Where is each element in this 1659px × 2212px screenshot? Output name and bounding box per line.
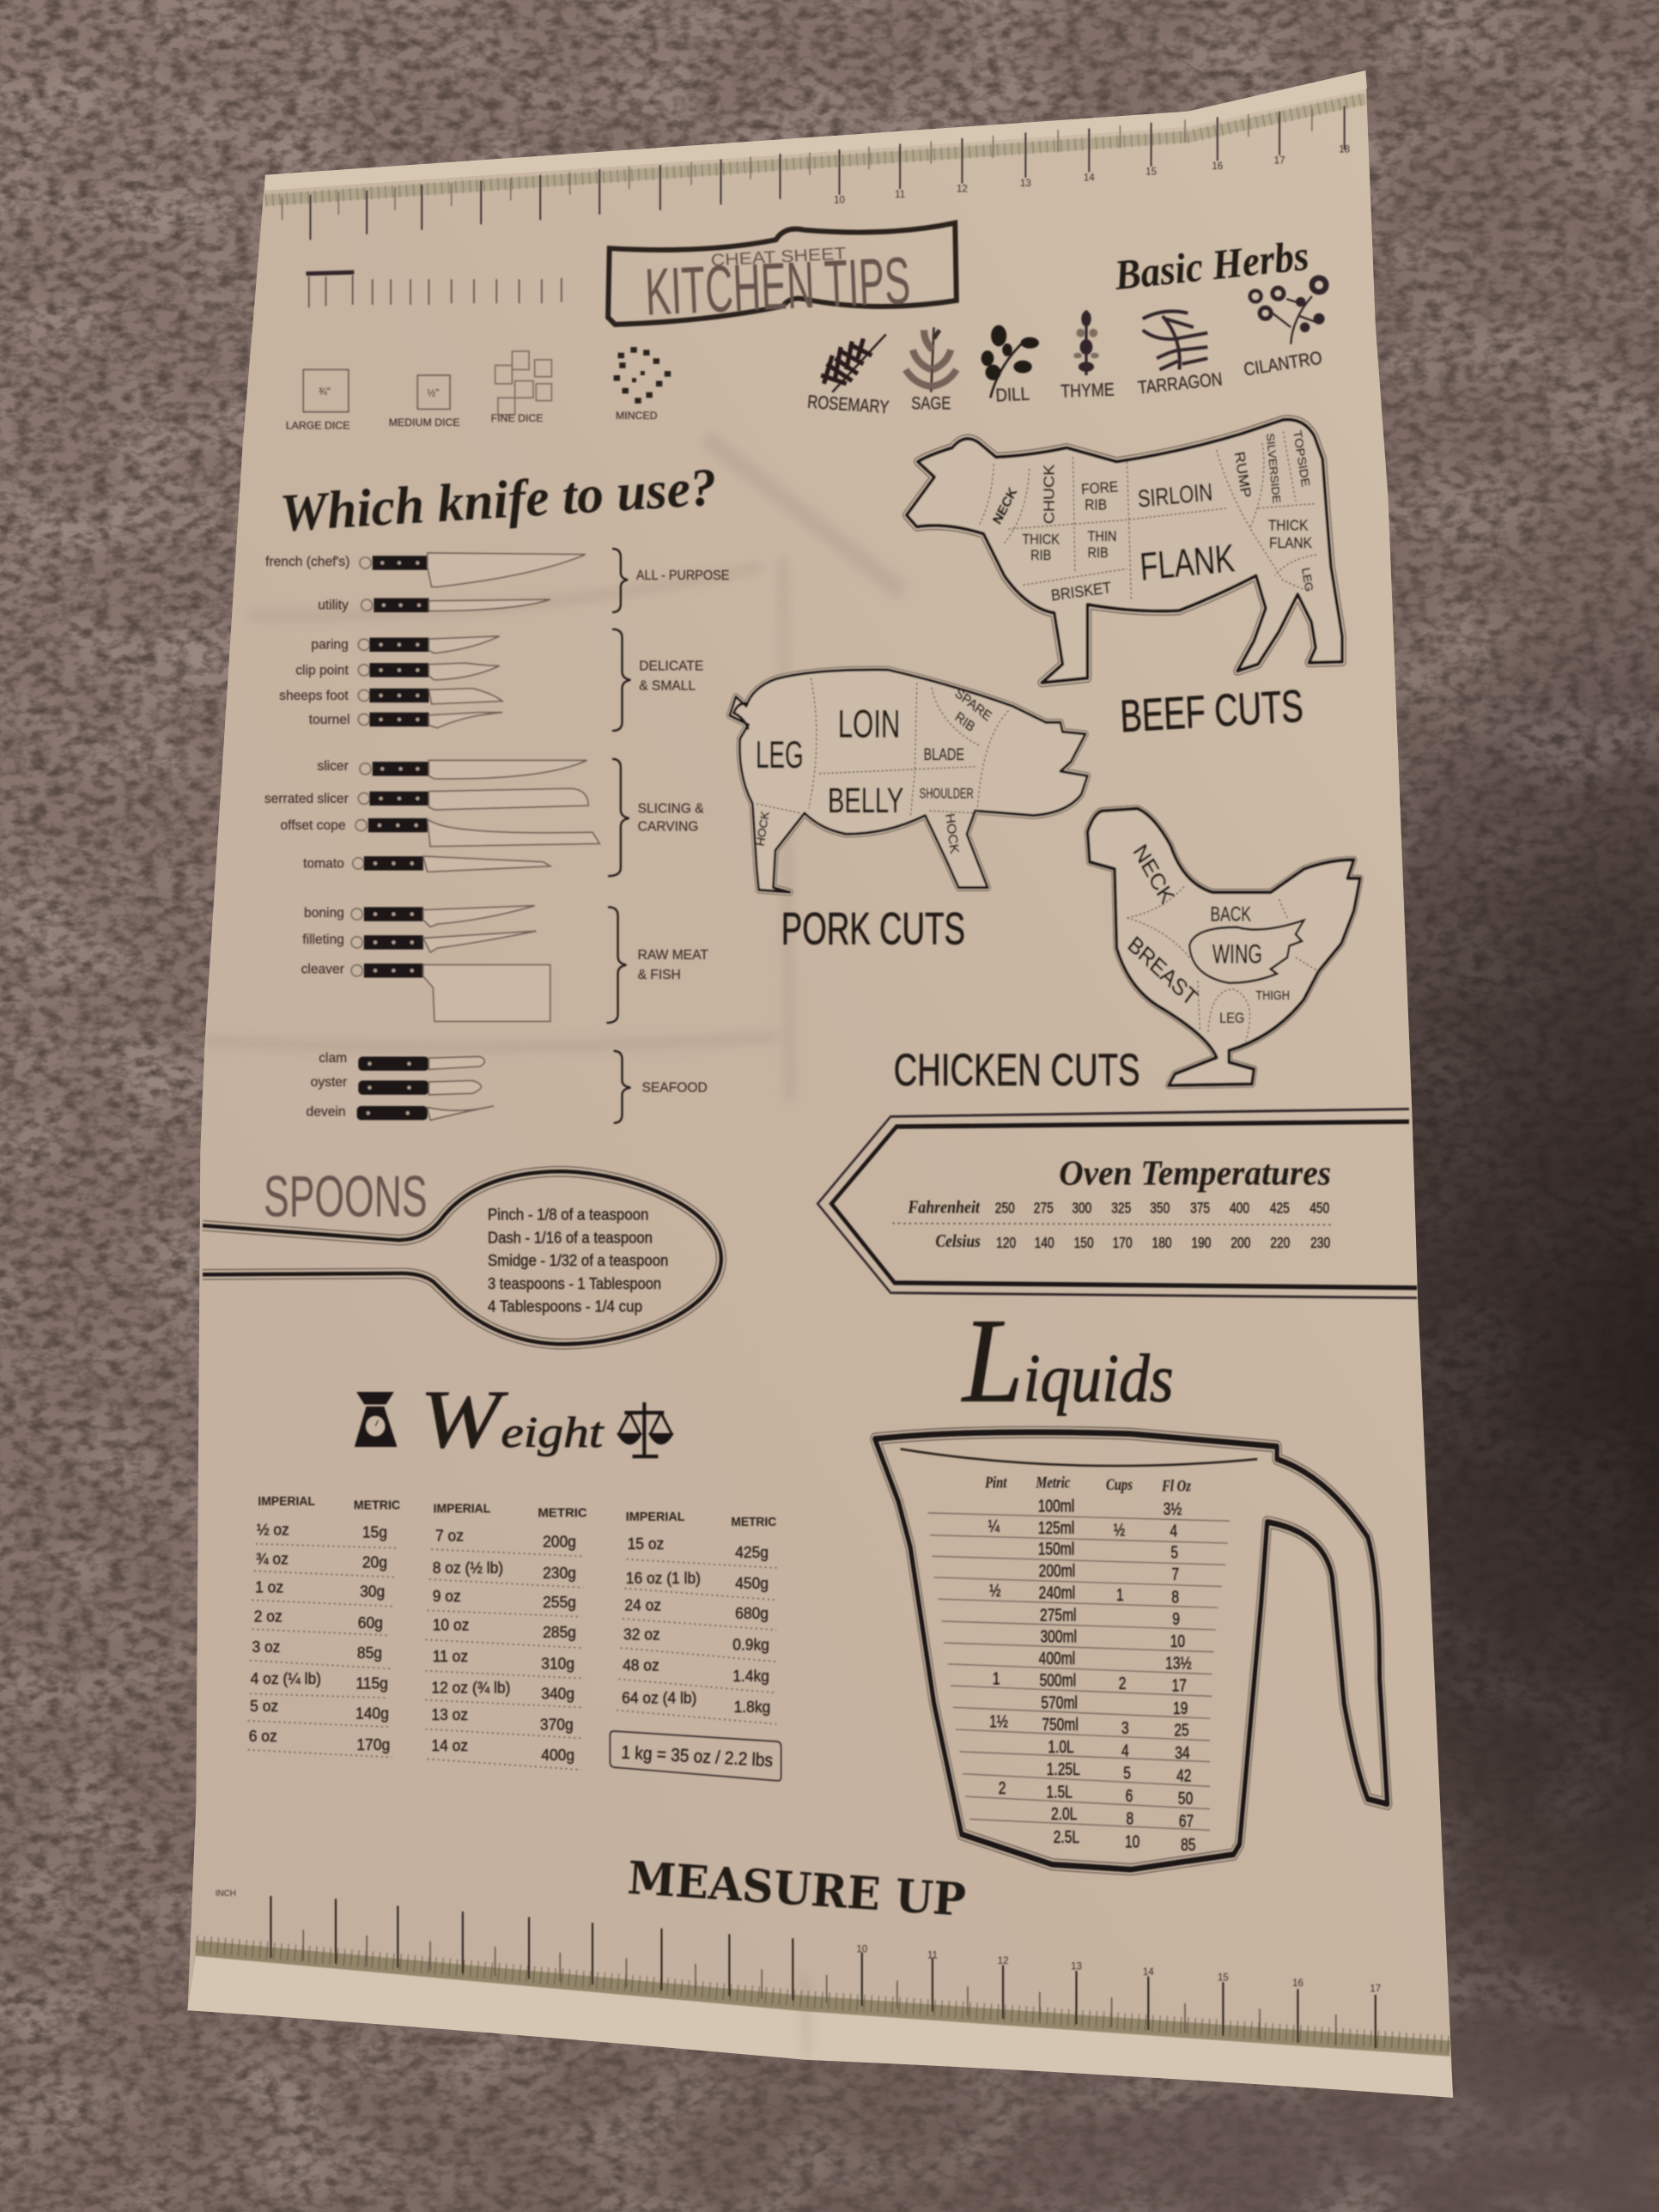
weight table column 3: 1.8kg (734, 1698, 770, 1716)
weight table column 1: 140g (356, 1705, 389, 1723)
label: slicing (638, 801, 704, 835)
weight table column 1: ¾ oz (256, 1550, 289, 1568)
pork cuts caption: PORK CUTS (781, 902, 965, 954)
jug table values: 3½ (1164, 1499, 1182, 1519)
bottom ruler (196, 1889, 1450, 2048)
bottom ruler: 17 (1370, 1984, 1381, 1995)
top ruler: 14 (1084, 173, 1095, 183)
knife: clam: clam (319, 1051, 347, 1066)
jug table values: 42 (1176, 1766, 1191, 1785)
beef cut labels: RIB (1087, 545, 1109, 561)
bottom ruler: 13 (1071, 1961, 1082, 1972)
beef cut labels: FLANK (1269, 535, 1312, 551)
beef cut labels (990, 429, 1316, 605)
weight table column 2: IMPERIAL (434, 1502, 491, 1516)
jug table values: 85 (1181, 1835, 1196, 1854)
spoon measures: 4 Tablespoons - 1/4 cup (488, 1297, 642, 1316)
knives heading: Which knife to use? (278, 456, 719, 543)
bottom ruler: 15 (1218, 1973, 1229, 1984)
top ruler: 18 (1339, 144, 1350, 155)
brace: slicing (608, 759, 629, 876)
weight table column 1: 170g (356, 1735, 390, 1753)
jug table values: 9 (1172, 1609, 1180, 1629)
spoon outline (203, 1171, 721, 1344)
beef cut labels: FLANK (1139, 537, 1237, 589)
weight table column 1: 115g (356, 1674, 388, 1692)
knife: slicer: slicer (317, 759, 349, 774)
celsius row: 180 (1152, 1235, 1172, 1251)
knife: sheeps foot (279, 689, 502, 704)
knife: utility: utility (318, 599, 349, 613)
celsius row: 120 (996, 1235, 1016, 1251)
thyme label: THYME (1060, 380, 1115, 402)
knife: slicer (317, 759, 586, 779)
beef cut labels: SILVERSIDE (1264, 433, 1283, 504)
jug table values: 1 (1116, 1585, 1124, 1604)
weight table column 1: 2 oz (254, 1607, 283, 1626)
spoon measures: Dash - 1/16 of a teaspoon (488, 1229, 653, 1247)
fahrenheit row: 350 (1150, 1200, 1170, 1217)
weight table column 2 (431, 1502, 587, 1764)
top ruler (265, 99, 1365, 240)
dice labels: LARGE DICE (286, 419, 349, 431)
knife: tomato: tomato (303, 856, 344, 871)
chicken cut labels: THIGH (1255, 988, 1290, 1003)
measure up heading: MEASURE UP (626, 1852, 967, 1927)
jug table values: 500ml (1040, 1671, 1076, 1690)
icon: balance (618, 1402, 672, 1456)
knife: cleaver: cleaver (301, 963, 344, 977)
jug table values: 1.5L (1046, 1782, 1073, 1802)
weight table column 2: 12 oz (¾ lb) (431, 1679, 510, 1697)
bottom ruler: 14 (1143, 1967, 1154, 1978)
dice labels: FINE DICE (491, 412, 543, 424)
meat cuts charts (730, 420, 1360, 1096)
weight table column 3: 48 oz (623, 1656, 659, 1674)
weight table column 2: 285g (543, 1624, 576, 1641)
fahrenheit row: 325 (1111, 1200, 1131, 1217)
jug table values: 300ml (1041, 1627, 1077, 1646)
jug table values: ½ (1114, 1520, 1125, 1540)
knife: clam (319, 1051, 484, 1071)
chopping sizes (286, 272, 671, 431)
jug table values: 1.0L (1048, 1737, 1074, 1757)
pork cut labels: HOCK (754, 811, 771, 848)
knife: offset: offset cope (280, 818, 345, 833)
knife: tomato (303, 856, 550, 872)
knife: clip point (295, 663, 500, 680)
spoons heading: SPOONS (264, 1164, 428, 1230)
dill icon (981, 326, 1038, 398)
weight table column 3: 450g (735, 1574, 769, 1592)
spoon measures: 3 teaspoons - 1 Tablespoon (488, 1274, 661, 1292)
weight table column 1: 4 oz (¼ lb) (251, 1670, 321, 1687)
jug table values (988, 1497, 1196, 1854)
beef cut labels: FORE (1081, 479, 1119, 498)
pork cut labels: SPARE (952, 685, 994, 725)
chicken cuts caption: CHICKEN CUTS (894, 1044, 1140, 1096)
conversion note box: 1 kg = 35 oz / 2.2 lbs (621, 1742, 774, 1771)
dice labels: MEDIUM DICE (389, 416, 460, 428)
pork cut labels: LOIN (838, 703, 900, 746)
rosemary icon (821, 334, 886, 392)
icon: kitchen scale (355, 1392, 397, 1447)
weight table column 3 (622, 1510, 776, 1716)
beef diagram (907, 420, 1342, 683)
weight table column 2: 230g (543, 1565, 576, 1582)
weight table column 3: 16 oz (1 lb) (626, 1570, 701, 1587)
jug table values: 8 (1171, 1587, 1179, 1607)
weight table column 3: METRIC (731, 1516, 776, 1529)
jug table values: 5 (1123, 1764, 1131, 1783)
cilantro icon (1250, 278, 1326, 344)
top ruler: 15 (1146, 167, 1157, 178)
knife: tournel: tournel (309, 713, 349, 727)
fine dice (495, 351, 551, 415)
jug table values: 6 (1126, 1786, 1133, 1805)
jug table values: 50 (1178, 1789, 1193, 1808)
weight table column 3: 1.4kg (732, 1667, 769, 1685)
chicken cut labels: BREAST (1123, 932, 1202, 1012)
knife: clip point: clip point (295, 663, 349, 678)
weight table column 2: 8 oz (½ lb) (433, 1559, 503, 1577)
jug table headers: Fl Oz (1161, 1477, 1191, 1495)
beef cut labels: THICK (1022, 532, 1060, 548)
title small line: CHEAT SHEET (710, 244, 847, 270)
beef cut labels: CHUCK (1041, 464, 1057, 524)
tarragon label: TARRAGON (1137, 368, 1224, 398)
jug table values: 100ml (1038, 1497, 1074, 1516)
weight table column 2: 370g (540, 1716, 574, 1734)
pork cut labels: LEG (756, 733, 804, 775)
knife: tournel (309, 713, 502, 728)
knife: paring: paring (311, 638, 349, 653)
weight table column 2: 9 oz (433, 1587, 461, 1605)
weight table column 1: 15g (362, 1523, 387, 1541)
jug table values: 10 (1170, 1632, 1185, 1650)
jug table values: 2.0L (1051, 1804, 1077, 1824)
label: delicate (639, 659, 703, 693)
brace: seafood (614, 1051, 630, 1123)
spoon measures (488, 1206, 668, 1316)
chicken diagram (1087, 809, 1360, 1085)
chicken cut labels: WING (1212, 939, 1262, 969)
weight table column 2: 14 oz (431, 1736, 468, 1754)
sage label: SAGE (911, 392, 951, 413)
fahrenheit row: 400 (1230, 1200, 1249, 1217)
celsius row: Celsius (935, 1231, 981, 1252)
weight table column 3: 680g (735, 1605, 769, 1622)
pork cut labels: RIB (952, 709, 977, 735)
jug table headers: Pint (984, 1474, 1008, 1492)
weight table column 2: 10 oz (433, 1616, 469, 1634)
basic herbs (806, 232, 1326, 417)
chicken cut labels (1123, 841, 1290, 1026)
spoon measures: Pinch - 1/8 of a teaspoon (488, 1206, 648, 1223)
minced dots (614, 347, 671, 404)
fahrenheit row: Fahrenheit (907, 1198, 981, 1218)
label: raw meat: RAW MEAT (638, 948, 708, 963)
beef cut labels: THICK (1268, 518, 1308, 534)
jug table headers: Cups (1106, 1475, 1133, 1493)
tea towel (187, 70, 1453, 2098)
knife: offset (280, 818, 599, 847)
medium dice size: ½" (428, 389, 439, 399)
oven arrow banner (817, 1109, 1417, 1297)
chicken cut labels: BACK (1210, 903, 1251, 926)
top ruler: 12 (957, 184, 968, 194)
herbs heading: Basic Herbs (1112, 232, 1311, 299)
knife: oyster: oyster (311, 1075, 347, 1090)
jug table values: 10 (1125, 1832, 1139, 1851)
bottom ruler: 16 (1292, 1978, 1304, 1989)
jug table values: 19 (1173, 1698, 1188, 1717)
top ruler: 11 (895, 190, 905, 200)
knives section (264, 456, 729, 1123)
jug table values: 2 (999, 1778, 1006, 1798)
weight table column 1: 3 oz (252, 1638, 280, 1656)
dice labels: MINCED (616, 410, 658, 422)
bottom ruler: 12 (998, 1956, 1008, 1966)
jug table values: 1½ (989, 1712, 1008, 1731)
jug table values: 67 (1179, 1811, 1194, 1831)
knife: deveiner (307, 1104, 494, 1120)
label: seafood: SEAFOOD (641, 1081, 708, 1096)
beef cut labels: RUMP (1231, 450, 1255, 499)
jug table values: 240ml (1039, 1583, 1075, 1602)
chicken cut labels: LEG (1219, 1011, 1244, 1026)
weight table column 1: 85g (357, 1644, 382, 1662)
large dice (303, 369, 349, 412)
jug rules (928, 1513, 1230, 1830)
top ruler: 10 (834, 196, 845, 206)
weight table column 2: 310g (541, 1655, 574, 1672)
fahrenheit row: 375 (1190, 1200, 1210, 1217)
knife: deveiner: devein (307, 1104, 345, 1119)
brace: delicate (612, 629, 630, 731)
weight table column 2: 13 oz (431, 1705, 468, 1723)
jug table values: 275ml (1040, 1606, 1077, 1625)
jug table values: 4 (1170, 1522, 1177, 1540)
dice labels (286, 410, 658, 431)
jug table values: 125ml (1038, 1518, 1074, 1537)
title cartouche (608, 223, 957, 330)
weight heading: Weight (420, 1374, 605, 1466)
rosemary label: ROSEMARY (806, 392, 890, 417)
jug table headers: Metric (1035, 1474, 1071, 1492)
jug table values: 2 (1119, 1674, 1127, 1693)
celsius row (935, 1231, 1330, 1252)
jug table values: 8 (1127, 1809, 1133, 1828)
knife: utility (318, 599, 550, 613)
jug table values: 13½ (1165, 1654, 1192, 1673)
jug table values: 570ml (1041, 1693, 1078, 1712)
top ruler: 17 (1274, 156, 1285, 167)
weight table column 3: 0.9kg (732, 1636, 769, 1654)
beef cut labels: NECK (990, 485, 1020, 527)
tarragon icon (1143, 312, 1207, 369)
beef cut labels: THIN (1087, 529, 1116, 544)
pork cut labels: BELLY (828, 781, 903, 820)
weight table column 3: 24 oz (624, 1596, 661, 1614)
oven temperatures panel (817, 1109, 1417, 1297)
top ruler: 16 (1212, 161, 1223, 172)
fahrenheit row: 275 (1034, 1200, 1054, 1217)
beef cut labels: RIB (1030, 548, 1051, 563)
knife: french: french (chef's) (265, 555, 349, 569)
weight table column 1: 20g (362, 1553, 387, 1571)
weight table column 1: 1 oz (255, 1578, 283, 1596)
large dice size: ¾" (319, 387, 331, 398)
dill label: DILL (995, 384, 1030, 406)
weight table column 2: 255g (543, 1594, 576, 1611)
chicken cut labels: NECK (1128, 841, 1178, 908)
pork cut labels: BLADE (924, 744, 964, 763)
beef cut labels: RIB (1085, 497, 1107, 514)
knife: sheeps foot: sheeps foot (279, 689, 349, 703)
celsius row: 140 (1035, 1235, 1054, 1251)
celsius row: 200 (1231, 1235, 1251, 1251)
label: delicate: DELICATE (639, 659, 703, 673)
weight table column 2: METRIC (538, 1506, 587, 1521)
jug table values: 4 (1121, 1741, 1129, 1760)
title main text: KITCHEN TIPS (643, 244, 912, 330)
label: delicate: & SMALL (639, 678, 696, 693)
celsius row: 150 (1074, 1235, 1094, 1251)
jug table values: 17 (1172, 1676, 1187, 1695)
jug table values: 7 (1171, 1565, 1179, 1583)
measuring jug (875, 1432, 1388, 1869)
knife: boning (304, 906, 535, 927)
jug table headers (984, 1474, 1191, 1495)
fahrenheit row: 425 (1270, 1200, 1290, 1217)
bottom ruler: 11 (927, 1950, 938, 1960)
jug table values: ½ (989, 1581, 1000, 1601)
knife: boning: boning (304, 906, 344, 921)
weight table column 1: 60g (358, 1613, 383, 1632)
weight table column 3: 425g (735, 1543, 769, 1561)
weight table column 3: 32 oz (623, 1626, 660, 1643)
label: slicing: CARVING (638, 820, 698, 835)
oven heading: Oven Temperatures (1059, 1153, 1331, 1192)
weight table column 3: 15 oz (628, 1535, 664, 1553)
jug table values: 25 (1174, 1721, 1189, 1740)
celsius row: 230 (1310, 1235, 1330, 1251)
brace: all purpose (612, 549, 628, 612)
pork diagram (730, 670, 1087, 892)
weight table column 1 (249, 1495, 400, 1753)
pork cut labels (754, 685, 994, 855)
jug table values: 1 (993, 1668, 1000, 1688)
medium dice (417, 375, 450, 409)
label: raw meat (638, 948, 708, 982)
weight table column 2: 7 oz (435, 1527, 464, 1545)
label: raw meat: & FISH (638, 968, 681, 982)
cilantro label: CILANTRO (1243, 347, 1323, 380)
weight table column 1: IMPERIAL (258, 1495, 315, 1509)
jug table values: 400ml (1039, 1649, 1075, 1668)
small measuring ruler (306, 272, 562, 307)
weight table column 1: METRIC (354, 1498, 400, 1513)
pork cut labels: HOCK (942, 812, 961, 855)
sage icon (906, 327, 957, 392)
conversion note box (610, 1731, 781, 1781)
weight table column 3: 64 oz (4 lb) (622, 1689, 696, 1707)
spoons and weight panel (203, 1164, 781, 1781)
knife: serrated slicer: serrated slicer (264, 792, 349, 806)
knife: serrated slicer (264, 788, 588, 810)
fahrenheit row: 300 (1072, 1200, 1092, 1217)
knife: paring (311, 636, 500, 653)
weight table column 1: 6 oz (249, 1728, 277, 1745)
bottom ruler: 10 (856, 1945, 867, 1955)
jug table values: 3 (1121, 1718, 1129, 1737)
weight table column 2: 340g (541, 1685, 574, 1703)
celsius row: 190 (1191, 1235, 1212, 1251)
jug table values: 750ml (1042, 1715, 1079, 1735)
liquids heading: Liquids (961, 1294, 1174, 1428)
label: all purpose: ALL - PURPOSE (636, 568, 729, 583)
celsius row: 170 (1113, 1235, 1133, 1251)
knife: oyster (311, 1075, 481, 1095)
celsius row: 220 (1270, 1235, 1290, 1251)
jug table values: 2.5L (1054, 1827, 1079, 1847)
fahrenheit row: 250 (995, 1200, 1015, 1217)
beef cut labels: LEG (1300, 567, 1316, 592)
weight table column 2: 200g (543, 1533, 576, 1550)
weight table column 1: 30g (360, 1583, 385, 1601)
jug table values: 1.25L (1047, 1759, 1080, 1778)
jug table values: ¼ (988, 1516, 1000, 1536)
weight table column 3: IMPERIAL (626, 1510, 685, 1524)
beef cuts caption: BEEF CUTS (1119, 679, 1304, 742)
knife: french (265, 553, 586, 586)
weight table column 2: 11 oz (433, 1648, 468, 1665)
jug table values: 150ml (1038, 1540, 1074, 1559)
jug table values: 5 (1170, 1543, 1178, 1562)
fahrenheit row: 450 (1310, 1200, 1329, 1217)
brace: raw meat (606, 907, 626, 1023)
thyme icon (1073, 310, 1099, 375)
jug table values: 200ml (1039, 1561, 1075, 1580)
fahrenheit row (907, 1198, 1329, 1218)
weight table column 1: 5 oz (250, 1698, 278, 1715)
label: slicing: SLICING & (638, 801, 704, 816)
beef cut labels: SIRLOIN (1137, 478, 1213, 513)
beef cut labels: TOPSIDE (1290, 429, 1312, 488)
bottom ruler: INCH (216, 1889, 236, 1899)
knife: filleting: filleting (302, 933, 344, 947)
jug table values: 34 (1175, 1743, 1190, 1763)
knife: cleaver (301, 963, 550, 1021)
weight table column 2: 400g (541, 1746, 574, 1764)
weight table column 1: ½ oz (257, 1521, 289, 1539)
spoon measures: Smidge - 1/32 of a teaspoon (488, 1252, 668, 1269)
beef cut labels: BRISKET (1050, 578, 1112, 605)
pork cut labels: SHOULDER (920, 787, 974, 802)
top ruler: 13 (1020, 179, 1031, 189)
liquids panel (875, 1294, 1388, 1869)
knife: filleting (302, 931, 536, 952)
